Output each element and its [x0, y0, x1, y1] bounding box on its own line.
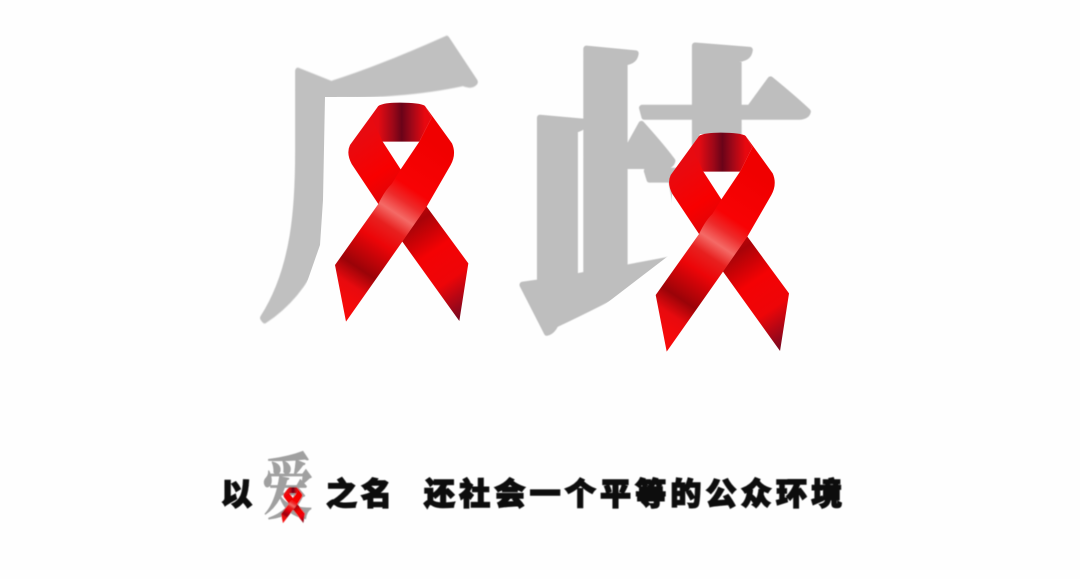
emblem: 爱 with small ribbon: 爱: [261, 451, 313, 528]
slogan: [221, 451, 846, 528]
slogan text: 之名: 之名: [326, 477, 396, 512]
slogan text: 还社会一个平等的公众环境: 还社会一个平等的公众环境: [424, 477, 846, 512]
character: 反: 反: [257, 30, 502, 358]
slogan text: 以: 以: [221, 477, 252, 512]
title: anti-discrimination characters with ribbons: [260, 35, 812, 352]
character: 歧: 歧: [515, 35, 816, 378]
icon: red ribbon on 反: [335, 103, 468, 322]
icon: red ribbon on 歧: [656, 133, 789, 352]
